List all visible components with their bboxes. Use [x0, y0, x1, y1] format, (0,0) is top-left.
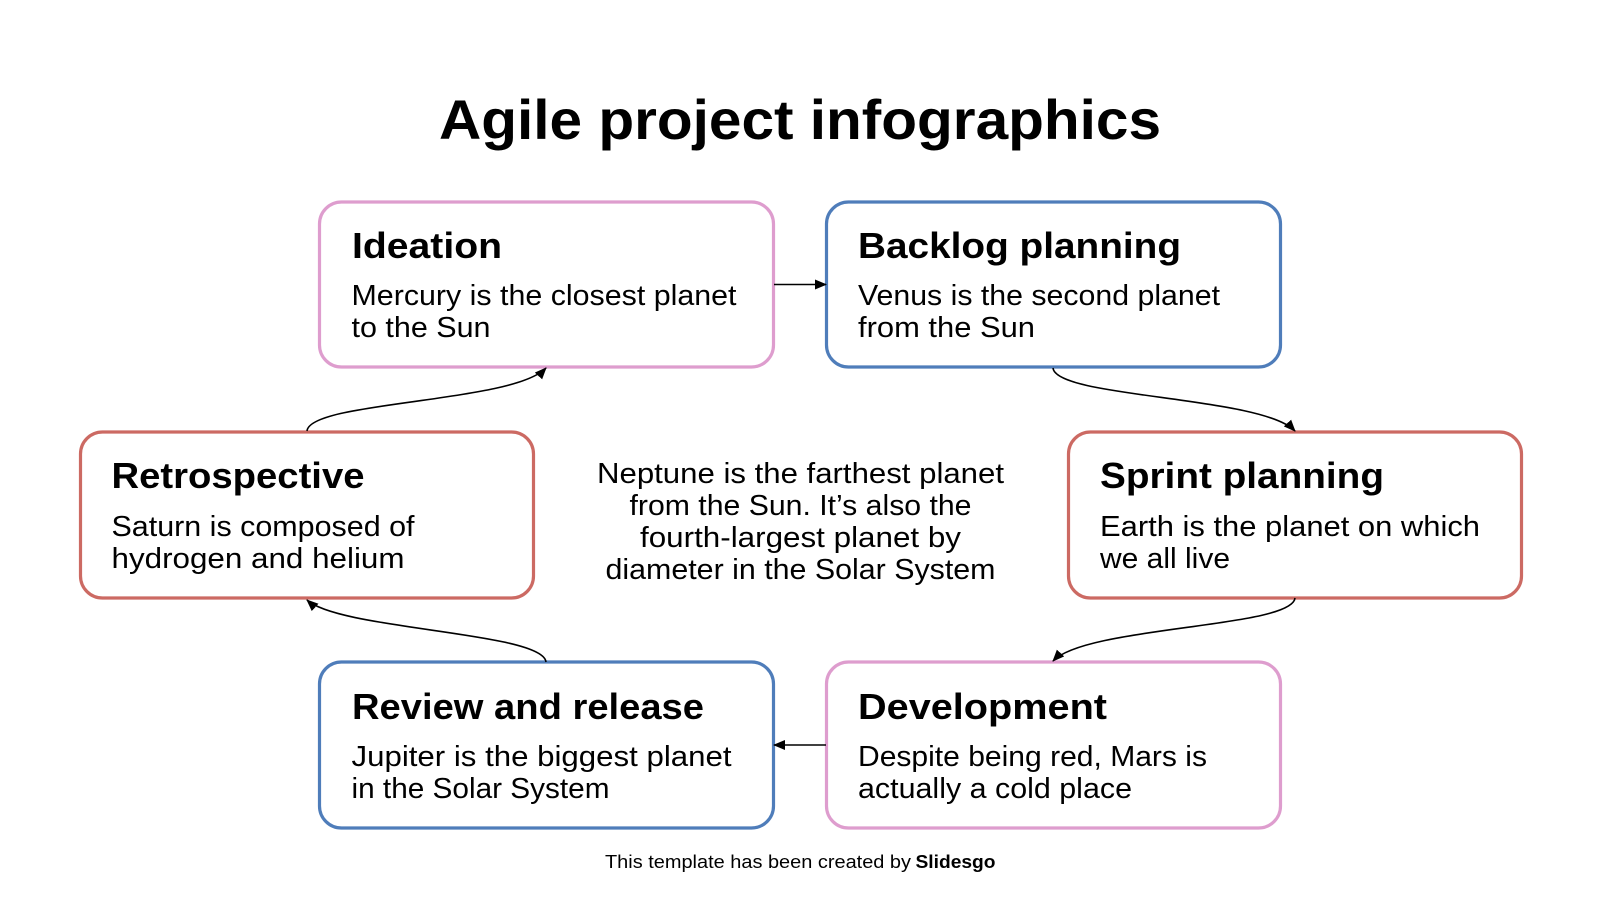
center text: fourth-largest planet by [640, 522, 962, 554]
panel: Sprint planning: Sprint planning [1100, 455, 1384, 496]
arrow: Ideation to Backlog planning [774, 284, 826, 286]
arrow: Development to Review and release [774, 744, 826, 746]
arrow: Review and release to Retrospective [307, 600, 546, 662]
panel: Review and release: Jupiter is the biggest planet [352, 741, 732, 773]
panel: Ideation [320, 202, 774, 367]
arrow: Sprint planning to Development [1053, 598, 1295, 661]
panel: Review and release: in the Solar System [352, 773, 610, 805]
panel: Backlog planning: Venus is the second planet [858, 280, 1220, 312]
panel: Sprint planning: we all live [1099, 543, 1230, 575]
center text: diameter in the Solar System [606, 554, 996, 586]
arrow: Retrospective to Ideation [307, 368, 546, 431]
panel: Backlog planning [826, 202, 1280, 367]
title: Agile project infographics [439, 88, 1161, 151]
center text: from the Sun. It’s also the [630, 490, 972, 522]
panel: Ideation: to the Sun [352, 312, 490, 344]
panel: Ideation: Mercury is the closest planet [352, 280, 737, 312]
panel: Development: Development [858, 686, 1107, 727]
panel: Ideation: Ideation [352, 225, 502, 266]
panel: Backlog planning: Backlog planning [858, 225, 1181, 266]
panel: Backlog planning: from the Sun [858, 312, 1035, 344]
panel: Retrospective: Retrospective [112, 455, 364, 496]
center text [597, 458, 1004, 586]
panel: Retrospective [80, 432, 534, 598]
panel: Development [826, 662, 1280, 828]
arrow: Backlog planning to Sprint planning [1053, 368, 1295, 431]
panel: Development: Despite being red, Mars is [858, 741, 1207, 773]
panel: Review and release [320, 662, 774, 828]
panel: Review and release: Review and release [352, 686, 704, 727]
center text: Neptune is the farthest planet [597, 458, 1004, 490]
panel: Retrospective: hydrogen and helium [112, 543, 404, 575]
panel: Retrospective: Saturn is composed of [112, 511, 415, 543]
panel: Development: actually a cold place [858, 773, 1132, 805]
panel: Sprint planning [1068, 432, 1522, 598]
footer credit: Slidesgo [916, 852, 996, 872]
panel: Sprint planning: Earth is the planet on which [1100, 511, 1480, 543]
footer credit: This template has been created by [605, 852, 911, 872]
